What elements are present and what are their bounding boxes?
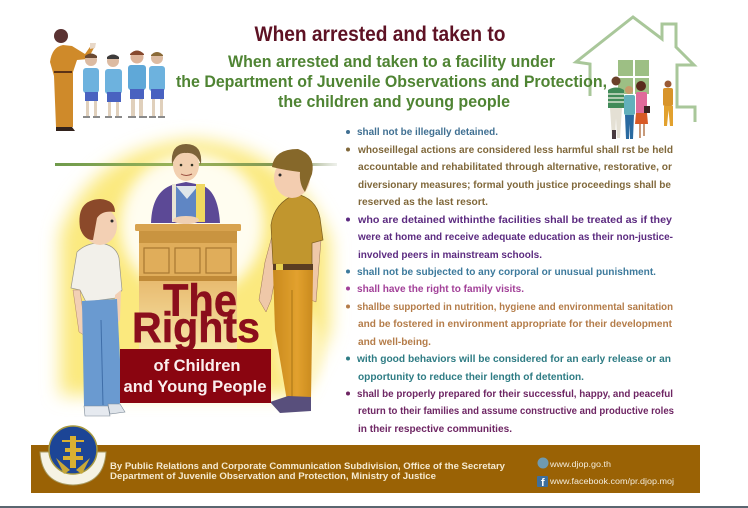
right: early release: opportunity to reduce their length of detention. [358,372,584,383]
right: prepared for return: shall be properly prepared for their successful, happy, and peaceful [357,389,673,400]
subtitle: green heading: the children and young people [278,92,510,111]
child [624,86,635,139]
right: nutrition and environment: and well-being. [358,337,431,348]
icon: house outline with window [576,17,695,122]
right: alternative measures [346,145,673,208]
podium [135,224,241,231]
red banner: of Children and Young People: of Children [154,357,240,375]
logo: department seal [40,426,106,485]
right: alternative measures: whoseillegal actions are considered less harmful shall rst be held [357,145,673,156]
right: early release: with good behaviors will be considered for an early release or an [356,354,671,365]
footer credit text [110,461,505,481]
green divider line [55,163,337,166]
right: alternative measures: accountable and rehabilitated through alternative, restorative, or [358,162,672,173]
officer from behind [50,29,96,131]
illustration: yellow glow behind courtroom [60,140,330,395]
right: prepared for return: return to their families and assume constructive and productive roles [358,406,675,417]
right: early release [346,354,671,383]
footer band [31,445,700,493]
icon: officer with four children in line [50,29,165,131]
right: treated as if at home: were at home and receive adequate education as their non-justice- [357,232,673,243]
judge robe [151,182,220,223]
right: not illegally detained: shall not be illegally detained. [357,127,498,138]
red banner: of Children and Young People [120,349,271,403]
right: family visits: shall have the right to family visits. [357,284,524,295]
child 4 [149,52,165,118]
right: nutrition and environment [346,302,673,348]
heading: The Rights: Rights [132,304,260,352]
facebook link with icon [537,476,674,489]
heading: The Rights: The [163,275,237,326]
icon: family and officer at the house [608,76,673,139]
website link with icon [538,458,611,469]
facebook link with icon: f [541,477,545,489]
child 3 [128,50,147,118]
right: treated as if at home: involved peers in mainstream schools. [358,250,542,261]
child 2 [105,54,122,118]
small officer [663,80,673,126]
facebook link with icon: www.facebook.com/pr.djop.moj [549,476,674,486]
illustration: judge at the podium [135,144,241,351]
right: treated as if at home [346,215,673,261]
father [608,76,624,139]
right: alternative measures: diversionary measures; formal youth justice proceedings shall be [358,180,672,191]
right: prepared for return: in their respective communities. [358,424,512,435]
subtitle: green heading [176,52,607,111]
title: dark red heading: When arrested and taken to [254,23,506,46]
footer credit text: Department of Juvenile Observation and Protection, Ministry of Justice [110,471,436,481]
right: nutrition and environment: shallbe supported in nutrition, hygiene and environmental sanitation [357,302,673,313]
right: no corporal punishment: shall not be subjected to any corporal or unusual punishment. [357,267,656,278]
child 1 [83,54,100,118]
illustration: boy in white shirt and jeans [71,199,125,416]
right: nutrition and environment: and be fostered in environment appropriate for their development [358,319,673,330]
right: prepared for return [346,389,675,435]
red banner: of Children and Young People: and Young People [124,378,266,396]
right: treated as if at home: who are detained withinthe facilities shall be treated as if they [357,215,673,226]
bottom edge strip [0,506,748,508]
subtitle: green heading: When arrested and taken to a facility under [228,52,555,71]
heading: The Rights [132,275,260,352]
subtitle: green heading: the Department of Juvenile Observations and Protection, [176,72,607,91]
hands [173,216,199,224]
website link with icon: www.djop.go.th [549,459,611,469]
rights list [346,127,675,435]
right: alternative measures: reserved as the last resort. [358,197,488,208]
judge head [173,149,199,181]
footer credit text: By Public Relations and Corporate Communication Subdivision, Office of the Secretary [110,461,505,471]
mother [635,81,650,138]
illustration: officer in khaki uniform [259,149,323,413]
